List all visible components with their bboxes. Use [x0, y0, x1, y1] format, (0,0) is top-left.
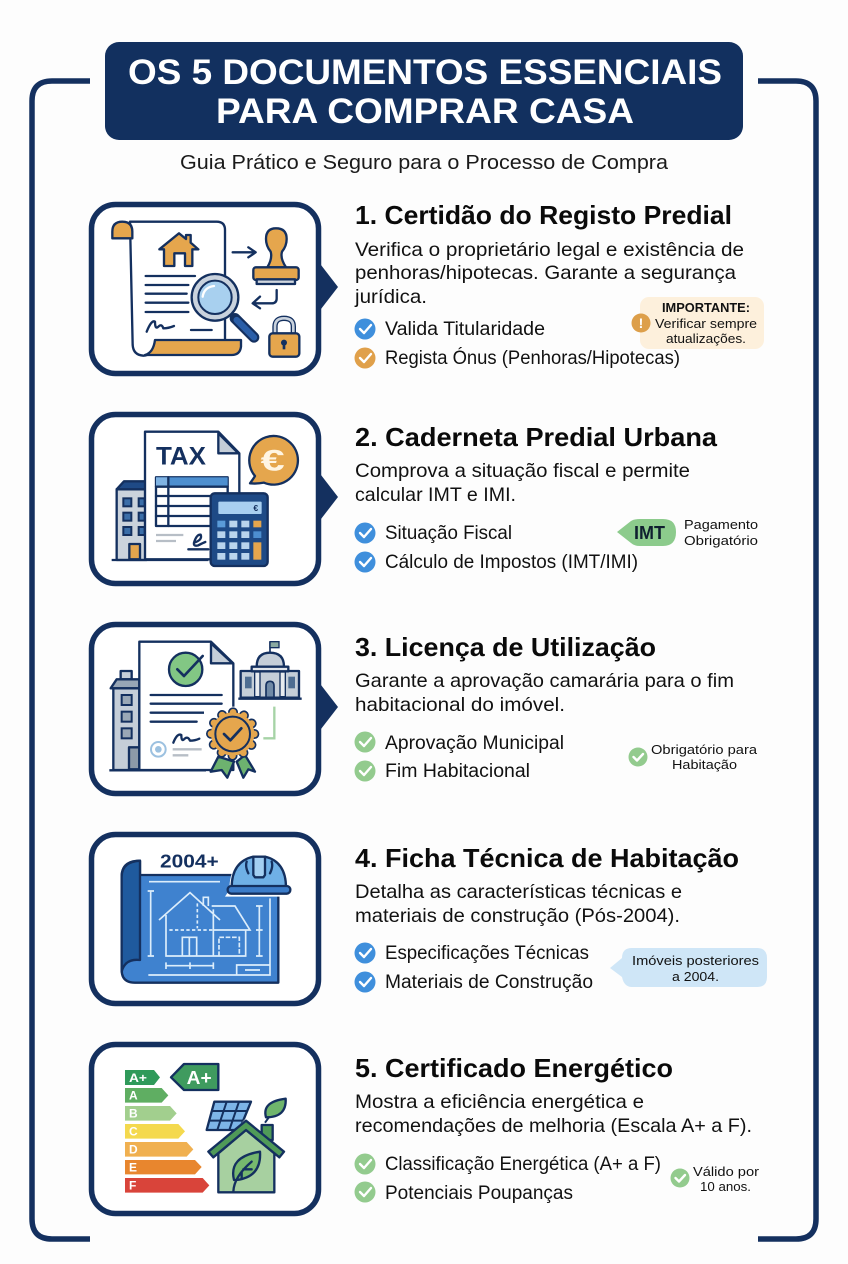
callout: IMT badge	[617, 517, 758, 548]
heading 4: 4. Ficha Técnica de Habitação	[355, 843, 739, 873]
callout: imóveis posteriores: Imóveis posteriores	[632, 953, 760, 968]
callout: obrigatório para habitação: Obrigatório para	[651, 742, 758, 757]
heading 5: 5. Certificado Energético	[355, 1053, 673, 1083]
callout: importante: atualizações.	[666, 331, 746, 346]
panel: document 3 icon card	[92, 624, 338, 794]
panel: document 1 icon card	[92, 204, 338, 374]
panel: document 2 icon card: €	[253, 503, 258, 513]
text block: document 1	[354, 200, 744, 369]
text block: document 3: habitacional do imóvel.	[355, 694, 565, 716]
text block: document 5: recomendações de melhoria (Escala A+ a F).	[355, 1115, 752, 1137]
panel: document 2 icon card: TAX	[156, 442, 206, 470]
callout: importante: IMPORTANTE:	[662, 300, 750, 315]
callout: IMT badge: Pagamento	[684, 517, 758, 532]
subtitle: Guia Prático e Seguro para o Processo de Compra	[180, 152, 669, 174]
callout: importante	[632, 297, 764, 349]
callout: importante: !	[639, 315, 643, 331]
text block: document 4: Materiais de Construção	[385, 972, 593, 993]
text block: document 4: Detalha as características técnicas e	[355, 881, 682, 903]
heading 3: 3. Licença de Utilização	[355, 632, 656, 662]
text block: document 5	[354, 1053, 752, 1204]
text block: document 1: Valida Titularidade	[385, 319, 545, 340]
text block: document 1: Verifica o proprietário legal e existência de	[355, 239, 744, 261]
text block: document 3: Aprovação Municipal	[385, 733, 564, 754]
title banner	[105, 42, 743, 140]
text block: document 2	[354, 422, 718, 573]
callout: válido por 10 anos: 10 anos.	[700, 1179, 751, 1194]
panel: document 5 icon card: A+	[187, 1067, 212, 1088]
panel: document 5 icon card: D	[129, 1143, 138, 1157]
callout: obrigatório para habitação: Habitação	[672, 757, 737, 772]
callout: válido por 10 anos: Válido por	[693, 1164, 760, 1179]
text block: document 5: Potenciais Poupanças	[385, 1183, 573, 1204]
heading 1: 1. Certidão do Registo Predial	[355, 200, 732, 230]
text block: document 2: Comprova a situação fiscal e permite	[355, 460, 690, 482]
callout: obrigatório para habitação	[628, 742, 758, 772]
panel: document 5 icon card: F	[129, 1179, 136, 1193]
text block: document 4: materiais de construção (Pós-2004).	[355, 905, 680, 927]
panel: document 5 icon card: A+	[129, 1071, 147, 1085]
panel: document 5 icon card: B	[129, 1107, 138, 1121]
panel: document 4 icon card	[92, 834, 318, 1004]
text block: document 3: Garante a aprovação camarária para o fim	[355, 670, 734, 692]
text block: document 2: Situação Fiscal	[385, 523, 512, 544]
callout: IMT badge: Obrigatório	[684, 533, 758, 548]
panel: document 5 icon card: E	[129, 1160, 137, 1174]
text block: document 1: jurídica.	[354, 286, 427, 308]
title banner: OS 5 DOCUMENTOS ESSENCIAIS	[128, 53, 722, 92]
text block: document 1: penhoras/hipotecas. Garante a segurança	[355, 262, 736, 284]
heading 2: 2. Caderneta Predial Urbana	[355, 422, 718, 452]
callout: válido por 10 anos	[670, 1164, 760, 1194]
text block: document 2: calcular IMT e IMI.	[355, 484, 516, 506]
panel: document 5 icon card: A	[129, 1089, 138, 1103]
panel: document 4 icon card: 2004+	[160, 850, 219, 871]
callout: importante: Verificar sempre	[655, 316, 757, 331]
text block: document 5: Mostra a eficiência energética e	[355, 1091, 644, 1113]
callout: imóveis posteriores	[610, 948, 767, 987]
text block: document 5: Classificação Energética (A+ a F)	[385, 1154, 661, 1175]
callout: imóveis posteriores: a 2004.	[672, 969, 719, 984]
text block: document 1: Regista Ónus (Penhoras/Hipotecas)	[385, 347, 680, 369]
text block: document 4: Especificações Técnicas	[385, 943, 589, 964]
title banner: PARA COMPRAR CASA	[216, 92, 634, 131]
panel: document 5 icon card	[92, 1044, 318, 1214]
panel: document 2 icon card	[92, 414, 338, 584]
text block: document 3	[354, 632, 734, 782]
panel: document 2 icon card: €	[261, 445, 285, 478]
text block: document 4	[354, 843, 739, 993]
text block: document 2: Cálculo de Impostos (IMT/IMI)	[385, 552, 638, 573]
panel: document 5 icon card: C	[129, 1125, 138, 1139]
callout: IMT badge: IMT	[634, 523, 665, 543]
text block: document 3: Fim Habitacional	[385, 761, 530, 782]
